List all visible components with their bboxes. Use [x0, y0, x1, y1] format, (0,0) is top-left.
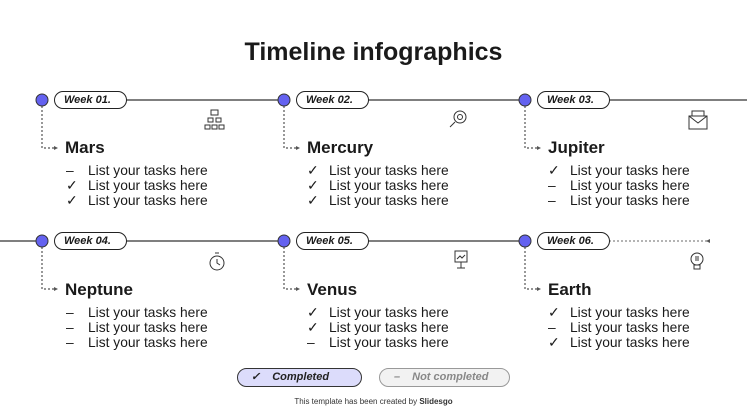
text: List your tasks here: [329, 320, 449, 335]
legend: not completed: [379, 368, 510, 387]
text: Neptune: [65, 280, 133, 299]
text: ✓: [548, 335, 560, 350]
text: List your tasks here: [570, 335, 690, 350]
text: Earth: [548, 280, 591, 299]
text: List your tasks here: [88, 335, 208, 350]
text: List your tasks here: [329, 193, 449, 208]
text: ✓: [307, 320, 319, 335]
legend: completed: [237, 368, 362, 387]
panel: Venus: [307, 280, 449, 350]
text: Week 02.: [306, 94, 353, 106]
text: List your tasks here: [329, 163, 449, 178]
text: –: [66, 163, 74, 178]
text: List your tasks here: [570, 193, 690, 208]
text: List your tasks here: [88, 163, 208, 178]
text: ✓: [548, 163, 560, 178]
footer: This template has been created by Slidesgo: [294, 397, 453, 406]
text: ✓: [66, 193, 78, 208]
text: Week 01.: [64, 94, 111, 106]
text: –: [307, 335, 315, 350]
panel: Mercury: [307, 138, 449, 208]
text: ✓: [548, 305, 560, 320]
text: –: [548, 178, 556, 193]
panel: Mars: [65, 138, 208, 208]
legend: not completed: – Not completed: [394, 371, 489, 383]
text: List your tasks here: [570, 163, 690, 178]
text: List your tasks here: [88, 193, 208, 208]
legend: completed: ✓ Completed: [251, 371, 329, 383]
text: List your tasks here: [570, 320, 690, 335]
text: Week 04.: [64, 235, 111, 247]
text: List your tasks here: [570, 178, 690, 193]
text: List your tasks here: [570, 305, 690, 320]
text: List your tasks here: [329, 335, 449, 350]
text: Week 03.: [547, 94, 594, 106]
text: List your tasks here: [88, 178, 208, 193]
text: Mars: [65, 138, 105, 157]
text: ✓: [307, 178, 319, 193]
panel: Jupiter: [548, 138, 690, 208]
title: Timeline infographics: [245, 38, 502, 66]
text: List your tasks here: [88, 320, 208, 335]
text: –: [66, 335, 74, 350]
text: –: [66, 305, 74, 320]
text: List your tasks here: [329, 305, 449, 320]
text: –: [66, 320, 74, 335]
text: List your tasks here: [88, 305, 208, 320]
text: Venus: [307, 280, 357, 299]
text: ✓: [307, 163, 319, 178]
text: ✓: [307, 305, 319, 320]
text: –: [548, 320, 556, 335]
text: Jupiter: [548, 138, 605, 157]
text: –: [548, 193, 556, 208]
text: ✓: [66, 178, 78, 193]
text: ✓: [307, 193, 319, 208]
pills: [54, 91, 610, 250]
panel: Neptune: [65, 280, 208, 350]
text: Mercury: [307, 138, 373, 157]
text: Week 05.: [306, 235, 353, 247]
text: List your tasks here: [329, 178, 449, 193]
panel: Earth: [548, 280, 690, 350]
text: Week 06.: [547, 235, 594, 247]
